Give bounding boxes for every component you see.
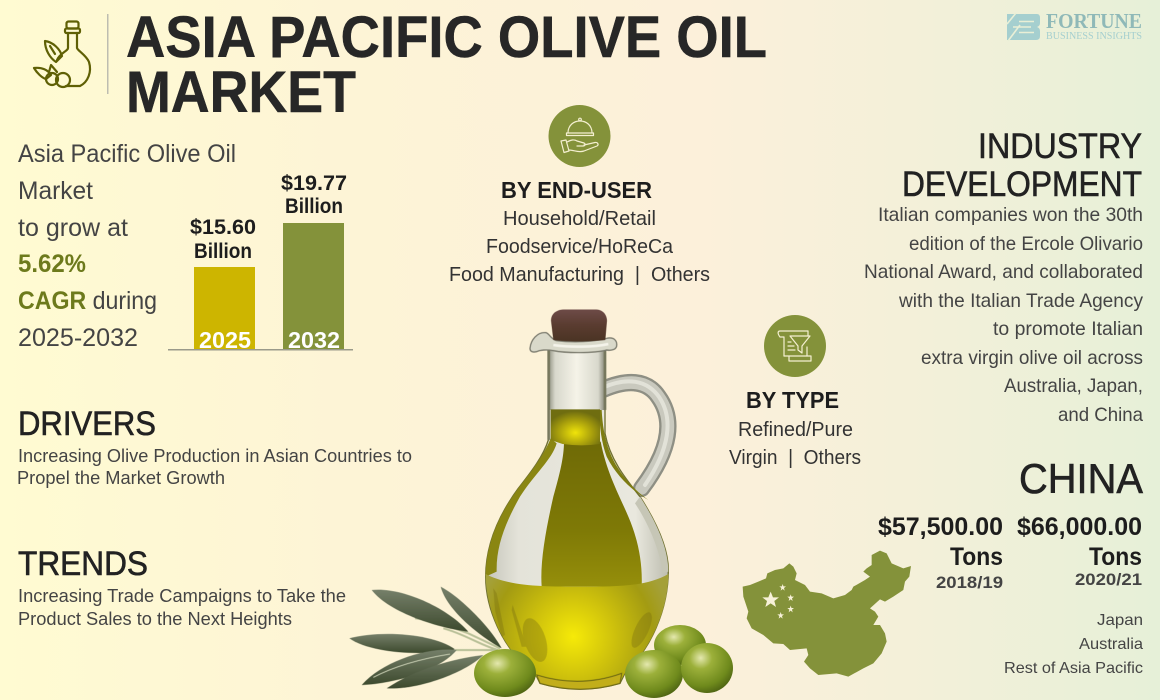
- jug lower oil: [486, 574, 668, 687]
- section: trends: Product Sales to the Next Heights: [18, 608, 292, 629]
- section: by type: Refined/Pure: [738, 419, 853, 441]
- text: market growth statement: 5.62%: [18, 250, 86, 278]
- list: other regions: Japan: [1097, 612, 1143, 629]
- section: China statistics: Tons: [950, 543, 1003, 571]
- title separator: [107, 14, 108, 94]
- section: by end-user: BY END-USER: [501, 177, 652, 203]
- section: trends: Increasing Trade Campaigns to Take the: [18, 585, 346, 606]
- section: industry development: to promote Italian: [993, 318, 1143, 340]
- section: industry development: DEVELOPMENT: [902, 165, 1142, 204]
- section: China statistics: 2018/19: [936, 573, 1003, 592]
- section: by end-user: Food Manufacturing | Others: [449, 264, 710, 286]
- bar chart: market size 2025 vs 2032: Billion: [194, 239, 252, 263]
- map: China: [743, 551, 911, 677]
- section: by type: Virgin | Others: [729, 447, 861, 469]
- section: drivers: DRIVERS: [18, 405, 156, 443]
- section: industry development: edition of the Ercole Olivario: [909, 233, 1143, 255]
- section: by end-user: Foodservice/HoReCa: [486, 236, 674, 258]
- text: market growth statement: [18, 140, 236, 352]
- list: other regions: [1004, 612, 1143, 677]
- section: China statistics: CHINA: [1019, 455, 1143, 502]
- section: drivers: Increasing Olive Production in Asian Countries to: [18, 445, 412, 466]
- section: industry development: [864, 127, 1143, 426]
- section: industry development: with the Italian Trade Agency: [898, 290, 1143, 312]
- list: other regions: Australia: [1079, 636, 1143, 653]
- jug cork: [551, 309, 607, 341]
- jug base: [537, 673, 622, 689]
- title: ASIA PACIFIC OLIVE OIL: [126, 5, 767, 70]
- jug neck oil: [551, 409, 600, 445]
- section: industry development: Italian companies won the 30th: [878, 204, 1143, 226]
- text: market growth statement: Asia Pacific Olive Oil: [18, 140, 236, 168]
- jug neck: [548, 350, 605, 410]
- title: [126, 5, 767, 125]
- jug left oil edge: [486, 438, 557, 577]
- section: China statistics: [878, 455, 1143, 592]
- icon: funnel on document: [764, 315, 826, 377]
- section: industry development: National Award, and collaborated: [864, 261, 1143, 283]
- logo: Fortune Business Insights: BUSINESS INSIGHTS: [1046, 31, 1142, 42]
- illustration: olive branch: [349, 587, 502, 688]
- text: market growth statement: CAGR during: [18, 287, 157, 315]
- text: market growth statement: to grow at: [18, 214, 128, 242]
- title: MARKET: [126, 60, 356, 125]
- section: drivers: [17, 405, 412, 488]
- section: by end-user: Household/Retail: [503, 208, 656, 230]
- section: China statistics: $66,000.00: [1017, 513, 1142, 541]
- jug body glass: [486, 350, 668, 689]
- section: by type: [729, 387, 861, 469]
- jug oil centre: [541, 442, 642, 587]
- section: trends: TRENDS: [18, 545, 148, 583]
- icon: serving cloche on hand: [548, 105, 610, 167]
- jug neck edges: [549, 350, 605, 440]
- logo: Fortune Business Insights: FORTUNE: [1046, 9, 1142, 33]
- bar chart: market size 2025 vs 2032: 2025: [199, 327, 251, 353]
- section: by end-user: [449, 177, 710, 286]
- jug right oil edge: [599, 410, 648, 500]
- section: industry development: extra virgin olive oil across: [921, 347, 1143, 369]
- section: industry development: INDUSTRY: [978, 127, 1142, 166]
- jug oil shadows: [493, 588, 656, 665]
- section: China statistics: 2020/21: [1075, 570, 1142, 589]
- illustration: olive oil jug: [486, 309, 668, 689]
- section: China statistics: $57,500.00: [878, 513, 1003, 541]
- text: market growth statement: 2025-2032: [18, 324, 138, 352]
- jug handle: [603, 381, 668, 488]
- text: market growth statement: Market: [18, 177, 93, 205]
- section: by type: BY TYPE: [746, 387, 839, 413]
- jug rim: [530, 333, 617, 353]
- logo: Fortune Business Insights: [1007, 9, 1142, 42]
- bar chart: market size 2025 vs 2032: $15.60: [190, 215, 256, 239]
- bar chart: market size 2025 vs 2032: 2032: [288, 327, 340, 353]
- list: other regions: Rest of Asia Pacific: [1004, 660, 1143, 677]
- illustration: olives: [474, 625, 733, 698]
- section: industry development: and China: [1058, 404, 1143, 426]
- bar chart: market size 2025 vs 2032: Billion: [285, 194, 343, 218]
- icon: olive oil bottle: [34, 22, 90, 87]
- section: industry development: Australia, Japan,: [1004, 375, 1143, 397]
- section: trends: [18, 545, 346, 629]
- section: China statistics: Tons: [1089, 543, 1142, 571]
- bar chart: market size 2025 vs 2032: [168, 171, 353, 353]
- bar chart: market size 2025 vs 2032: $19.77: [281, 171, 347, 195]
- section: drivers: Propel the Market Growth: [17, 467, 225, 488]
